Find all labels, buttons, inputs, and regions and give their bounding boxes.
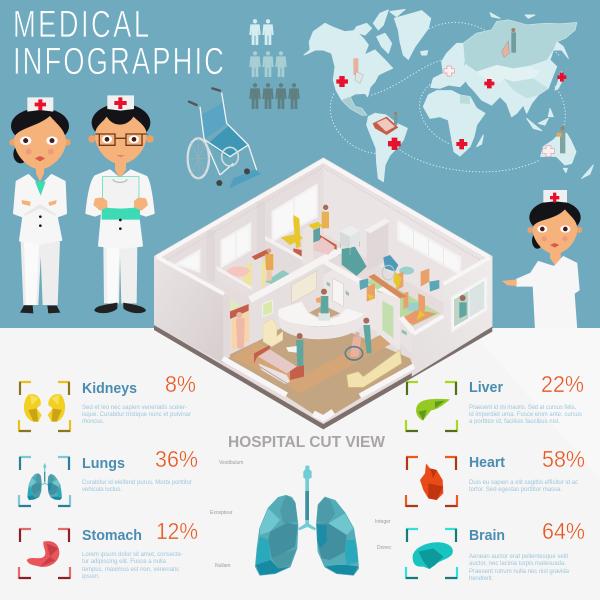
dotted connection routes: [330, 22, 565, 172]
patient bed: [254, 345, 304, 384]
text: heart: tortor. Sed egestas porttitor massa.: [469, 487, 562, 493]
heading: stomach: Stomach: [82, 527, 142, 544]
heart frame: [406, 457, 457, 507]
upper left room furniture: [227, 248, 273, 281]
tiny figures on the map: [353, 28, 565, 153]
text: liver: id imperdiet urna. Fusce enim ante, cursus: [469, 412, 582, 418]
text: heart: Duis eu sapien a elit sagittis efficitur id ac: [469, 480, 578, 486]
windows on back walls: [177, 185, 460, 274]
text: kidneys: isque. Curabitur tristique nunc et pulvinar: [82, 412, 191, 418]
value: 8%: 8%: [165, 371, 196, 397]
heading: hospital cut view: HOSPITAL CUT VIEW: [228, 434, 386, 451]
panel: kidneys: [19, 371, 196, 432]
text: kidneys: Sed et leo nec sapien venenatis sceler-: [82, 405, 187, 411]
lung labels: Vestibulum: [219, 460, 243, 466]
heading: brain: Brain: [469, 527, 505, 544]
icon: heart: [420, 463, 443, 500]
text: liver: [469, 405, 582, 425]
world map: [304, 9, 593, 182]
patient in wheelchair with nurse: [345, 318, 372, 360]
text: brain: Aenean auctor erat pellentesque velit: [469, 554, 568, 560]
text: brain: hendrerit.: [469, 576, 493, 582]
light lower panel: [0, 328, 600, 600]
wall rims: [157, 161, 490, 418]
value: 22%: 22%: [541, 371, 584, 397]
icon: kidneys: [24, 394, 65, 422]
text: stomach: Lorem ipsum dolor sit amet, consecte-: [82, 552, 183, 558]
orange doorway room: [223, 293, 249, 363]
upper room bed and nurse: [303, 205, 337, 265]
nurse with crossed arms: [9, 97, 71, 313]
title: [13, 4, 224, 83]
window on right wall: [452, 277, 487, 332]
heading: lungs: Lungs: [82, 455, 125, 472]
nurse presenting on the right: [502, 190, 582, 330]
text: lungs: [82, 480, 192, 493]
title: INFOGRAPHIC: [13, 41, 224, 83]
heading: heart: Heart: [469, 454, 505, 471]
panel: stomach: [19, 518, 198, 580]
text: stomach: [82, 552, 183, 580]
icon: stomach: [27, 541, 59, 567]
heading: kidneys: Kidneys: [82, 380, 137, 397]
text: kidneys: [82, 405, 191, 425]
floor: [154, 157, 492, 424]
icon: liver: [416, 399, 450, 421]
upper room floors: [225, 247, 440, 328]
icon: small lungs: [28, 464, 62, 500]
left front wall: [154, 256, 223, 363]
isometric hospital cut view: [154, 157, 492, 429]
lung labels: Integer: [375, 519, 391, 525]
value: 36%: 36%: [155, 446, 198, 472]
right front wall: [412, 256, 492, 377]
map markers: [336, 73, 566, 150]
dining room furniture: [359, 255, 439, 320]
base: [154, 323, 492, 429]
armchair: [263, 318, 283, 347]
value: 58%: 58%: [542, 446, 585, 472]
lungs frame: [19, 457, 70, 507]
panel: brain: [406, 518, 585, 582]
value: 12%: 12%: [156, 518, 198, 544]
sofa: [347, 350, 402, 387]
title: MEDICAL: [13, 4, 149, 46]
text: heart: [469, 480, 578, 493]
lung labels: Nullam: [215, 563, 231, 569]
text: liver: a porttitor id, facilisis faucibus nisl.: [469, 419, 560, 425]
text: kidneys: rhoncus.: [82, 419, 104, 425]
main floor: [222, 313, 413, 421]
text: brain: Praesent rutrum nulla nec nisl gravida: [469, 569, 570, 575]
lung labels: Excepteur: [210, 510, 233, 516]
value: 64%: 64%: [542, 518, 585, 544]
nurse by bed: [286, 333, 303, 366]
doctor with glasses and clipboard: [86, 95, 154, 313]
nurse at reception: [316, 289, 328, 313]
icon: brain: [413, 542, 453, 569]
panel: heart: [406, 446, 585, 507]
stomach frame: [19, 529, 70, 579]
text: liver: Praesent id mi mauris. Sed at cursus felis,: [469, 405, 576, 411]
brain frame: [406, 529, 457, 579]
text: lungs: Curabitur id eleifend purus. Morbi porttitor: [82, 480, 192, 486]
panel: liver: [406, 371, 584, 432]
medical cabinet: [340, 226, 360, 255]
panel: lungs: [19, 446, 198, 507]
text: stomach: ipsum.: [82, 574, 100, 580]
text: brain: auctor, nec lacinia turpis malesuada.: [469, 561, 566, 567]
yellow hoist: [281, 215, 303, 257]
people statistics icons: [249, 19, 300, 109]
liver frame: [406, 382, 457, 432]
text: lungs: vehicula luctus.: [82, 487, 122, 493]
text: stomach: tur adipiscing elit. Fusce a nulla: [82, 559, 167, 565]
lung labels: Donec: [377, 545, 392, 551]
reception desk: [278, 302, 364, 339]
partition walls: [207, 202, 390, 299]
text: stomach: tempus, maximus est non, venenatis: [82, 567, 179, 573]
lung labels: [210, 460, 392, 569]
kidneys frame: [19, 382, 70, 432]
text: brain: [469, 554, 570, 582]
continents: [304, 9, 593, 182]
back walls: [163, 165, 483, 326]
wheelchair: [188, 88, 261, 188]
reception walls: [248, 247, 415, 353]
heading: liver: Liver: [469, 379, 503, 396]
large lungs diagram: [256, 466, 358, 575]
